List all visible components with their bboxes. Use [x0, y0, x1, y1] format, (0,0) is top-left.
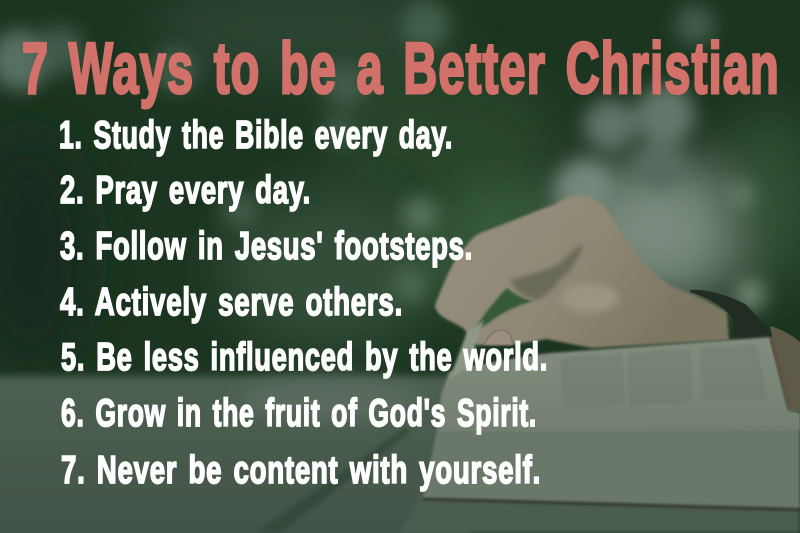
hand — [435, 195, 800, 412]
item 6: 6. Grow in the fruit of God's Spirit. — [61, 392, 537, 435]
item 2: 2. Pray every day. — [60, 169, 311, 212]
item 1: 1. Study the Bible every day. — [59, 114, 453, 157]
item 7: 7. Never be content with yourself. — [61, 449, 541, 492]
hand highlight — [562, 284, 618, 312]
wrist — [770, 326, 800, 412]
thumbnail — [484, 330, 512, 345]
green gap between fingers — [472, 288, 534, 333]
list of seven ways — [59, 114, 548, 492]
wristband — [690, 290, 772, 340]
item 4: 4. Actively serve others. — [60, 281, 403, 324]
item 3: 3. Follow in Jesus' footsteps. — [60, 225, 473, 268]
open book — [423, 337, 800, 510]
item 5: 5. Be less influenced by the world. — [61, 336, 548, 379]
table surface — [0, 376, 800, 533]
palm shadow — [510, 243, 583, 300]
book text lines — [560, 344, 767, 408]
page turning edge — [450, 320, 484, 378]
